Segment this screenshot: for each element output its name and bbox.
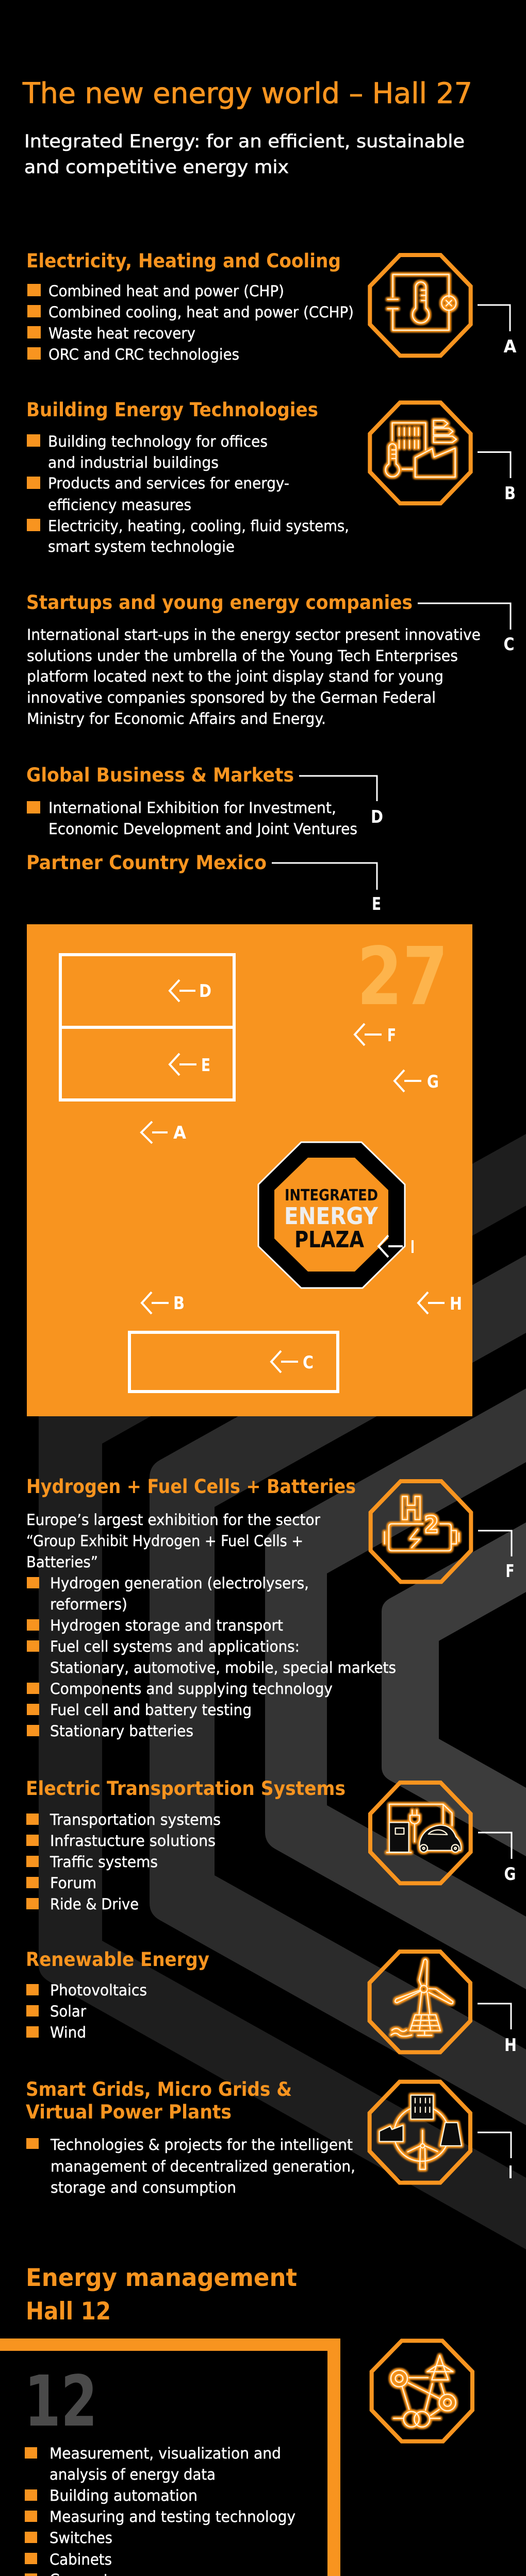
connector: B: B [504, 483, 516, 504]
marker H: H [450, 1294, 462, 1314]
bullet list: Switches [50, 2529, 112, 2547]
bullet list: Components and supplying technology [50, 1680, 333, 1698]
bullet list: Photovoltaics [50, 1981, 147, 1999]
panel: electric transportation systems [26, 1777, 516, 1913]
heading: Virtual Power Plants [26, 2101, 232, 2123]
heading: Hall 12 [26, 2297, 111, 2326]
marker B [142, 1292, 185, 1314]
panel: smart grids [26, 2078, 513, 2196]
heading: Startups and young energy companies [26, 591, 413, 614]
bullet list [27, 282, 354, 363]
hall number 12: 12 [24, 2361, 97, 2443]
title: The new energy world – Hall 27 [22, 77, 472, 110]
marker C: C [303, 1352, 314, 1373]
bullet list: Hydrogen storage and transport [50, 1617, 283, 1634]
bullet list: efficiency measures [48, 496, 191, 514]
bullet list [25, 2445, 295, 2576]
connector: F: F [505, 1561, 515, 1582]
bullet list: Fuel cell systems and applications: [50, 1638, 300, 1655]
bullet list: Forum [50, 1874, 96, 1892]
bullet list: Electricity, heating, cooling, fluid systems, [48, 517, 349, 535]
bullet list: Technologies & projects for the intelligent [50, 2136, 353, 2154]
marker G [395, 1070, 439, 1092]
heading: Hydrogen + Fuel Cells + Batteries [26, 1476, 356, 1498]
bullet list: International Exhibition for Investment, [48, 799, 336, 817]
bullet list: Stationary batteries [50, 1722, 193, 1740]
heading [26, 2078, 292, 2123]
text block [27, 626, 481, 727]
bullet list: Combined heat and power (CHP) [48, 282, 284, 300]
bullet list: Fuel cell and battery testing [50, 1701, 252, 1719]
marker A: A [173, 1123, 187, 1143]
bullet list [26, 1981, 147, 2041]
bullet list: Traffic systems [50, 1853, 158, 1871]
connector: E: E [372, 894, 381, 914]
connector: I: I [508, 2162, 513, 2183]
marker A [141, 1122, 187, 1143]
connector: D [299, 776, 383, 827]
bullet list: analysis of energy data [50, 2466, 216, 2483]
panel: renewable energy [26, 1948, 517, 2056]
bullet list: Waste heat recovery [48, 325, 195, 342]
area outline D and E [60, 955, 234, 1100]
connector: G [478, 1833, 516, 1885]
panel: partner country mexico [26, 852, 381, 914]
connector: E [272, 863, 381, 914]
marker C [271, 1351, 314, 1373]
bullet list: reformers) [50, 1596, 127, 1613]
text block [26, 1511, 321, 1571]
connector: I [478, 2132, 513, 2183]
bullet list: Ride & Drive [50, 1895, 139, 1913]
heading: Electricity, Heating and Cooling [26, 250, 341, 272]
panel: hydrogen fuel cells batteries [26, 1476, 515, 1740]
connector: A: A [503, 336, 517, 357]
panel: electricity, heating and cooling [26, 250, 517, 363]
icon: hydrogen battery [371, 1481, 471, 1582]
icon: thermometer in circuit [370, 255, 471, 355]
panel: building energy technologies [26, 399, 516, 555]
icon: electric car charging [370, 1783, 471, 1883]
bullet list: Transportation systems [50, 1811, 221, 1828]
panel: global business and markets [26, 764, 383, 838]
subtitle [24, 131, 465, 178]
bullet list: ORC and CRC technologies [48, 346, 239, 363]
area outline C [129, 1332, 338, 1392]
subtitle: and competitive energy mix [24, 157, 289, 178]
bullet list [27, 1574, 396, 1740]
heading: Energy management [26, 2264, 297, 2292]
bullet list [26, 1811, 221, 1913]
background hexagon bands [39, 1134, 526, 2249]
bullet list: Hydrogen generation (electrolysers, [50, 1574, 309, 1592]
icon: hydrogen battery: H [400, 1490, 422, 1527]
icon: hydrogen battery: 2 [424, 1511, 439, 1538]
marker G: G [427, 1072, 439, 1092]
marker I: I [410, 1237, 415, 1258]
bullet list: Building technology for offices [48, 433, 268, 450]
text block: innovative companies sponsored by the German Federal [27, 689, 436, 706]
bullet list: Products and services for energy- [48, 474, 289, 492]
connector: C: C [503, 634, 515, 655]
panel: startups and young energy companies [26, 591, 515, 727]
connector: C [418, 603, 515, 655]
heading [26, 2264, 297, 2326]
icon: wind turbine and solar panel [370, 1952, 470, 2052]
connector: B [478, 452, 516, 504]
bullet list: Measuring and testing technology [50, 2508, 295, 2526]
hall plan map [27, 924, 472, 1416]
marker D [170, 980, 211, 1002]
marker E [170, 1054, 210, 1076]
heading: Partner Country Mexico [26, 852, 267, 874]
connector: F [478, 1531, 515, 1582]
text block: Batteries” [26, 1553, 98, 1571]
plaza octagon: INTEGRATED [285, 1187, 378, 1205]
heading: Smart Grids, Micro Grids & [26, 2078, 292, 2100]
marker B: B [173, 1293, 185, 1314]
panel: energy management hall 12 [0, 2264, 472, 2576]
bullet list: and industrial buildings [48, 454, 219, 471]
subtitle: Integrated Energy: for an efficient, sustainable [24, 131, 465, 152]
bullet list: Measurement, visualization and [50, 2445, 281, 2462]
bullet list [27, 433, 349, 555]
frame [0, 2338, 340, 2576]
bullet list: Economic Development and Joint Ventures [48, 820, 357, 838]
bullet list: Wind [50, 2024, 86, 2041]
plaza octagon [258, 1142, 405, 1288]
heading: Renewable Energy [26, 1948, 209, 1971]
marker E: E [201, 1055, 210, 1076]
connector: H: H [504, 2035, 517, 2056]
heading: Electric Transportation Systems [26, 1777, 346, 1800]
text block: International start-ups in the energy sector present innovative [27, 626, 481, 643]
plaza octagon: PLAZA [294, 1227, 364, 1253]
marker D: D [199, 981, 211, 1002]
marker I [379, 1235, 415, 1258]
bullet list: storage and consumption [51, 2179, 236, 2196]
text block: “Group Exhibit Hydrogen + Fuel Cells + [26, 1532, 303, 1550]
connector: G: G [504, 1864, 516, 1885]
plaza octagon: ENERGY [284, 1202, 379, 1230]
text block: platform located next to the joint display stand for young [27, 668, 443, 685]
heading: Global Business & Markets [26, 764, 294, 786]
icon: building and factory [370, 402, 471, 503]
connector: A [478, 305, 517, 357]
connector: H [478, 2004, 517, 2056]
bullet list: Solar [50, 2003, 87, 2020]
bullet list: Building automation [50, 2487, 198, 2504]
bullet list: management of decentralized generation, [51, 2158, 355, 2175]
text block: solutions under the umbrella of the Young Tech Enterprises [27, 647, 458, 665]
marker F: F [387, 1025, 396, 1046]
bullet list: Stationary, automotive, mobile, special markets [50, 1659, 396, 1676]
bullet list [27, 799, 357, 838]
connector: D: D [371, 807, 383, 827]
marker F [355, 1024, 396, 1046]
text block: Ministry for Economic Affairs and Energy. [27, 710, 326, 727]
bullet list: smart system technologie [48, 538, 235, 555]
bullet list: Combined cooling, heat and power (CCHP) [48, 303, 354, 321]
icon: virtual power plant ring [370, 2082, 470, 2183]
icon: power network [372, 2341, 472, 2442]
marker H [418, 1292, 462, 1314]
bullet list: Infrastucture solutions [50, 1832, 216, 1850]
heading: Building Energy Technologies [26, 399, 318, 421]
hall number 27: 27 [357, 930, 448, 1023]
bullet list: Cabinets [50, 2551, 112, 2568]
bullet list [26, 2136, 355, 2196]
text block: Europe’s largest exhibition for the sector [26, 1511, 321, 1529]
